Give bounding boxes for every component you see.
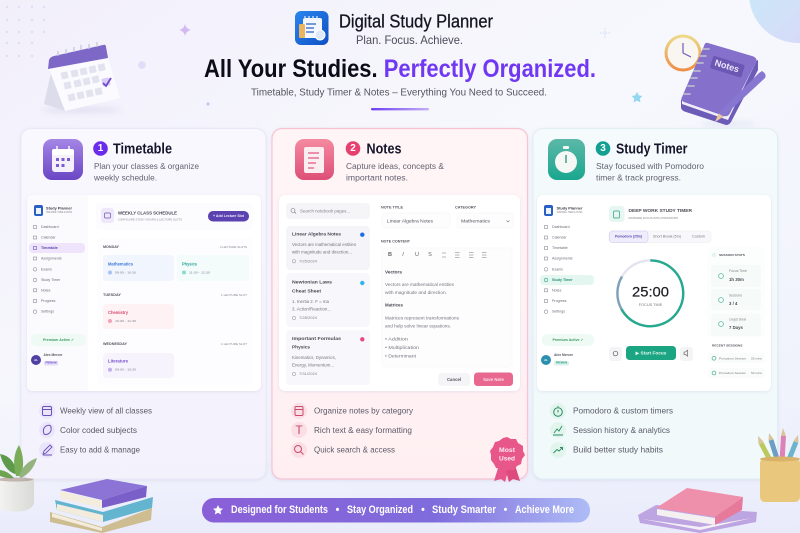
recent sessions: 50 mins (751, 371, 762, 375)
recent sessions: Pomodoro Session (719, 356, 746, 360)
weekly schedule: 11:00 - 12:30 (189, 270, 210, 274)
rich text editor: and help solve linear equations. (385, 324, 451, 328)
icon: star (213, 505, 223, 514)
timer controls (609, 346, 693, 361)
weekly schedule: TUESDAY (103, 293, 122, 297)
premium status: Premium Active ✓ (552, 338, 584, 342)
premium status (31, 334, 86, 346)
sidebar navigation: Settings (41, 310, 54, 314)
heading: study timer: Study Timer (616, 140, 688, 158)
user profile: Alex Mercer (554, 353, 574, 357)
bottom banner (202, 498, 590, 522)
weekly schedule: Chemistry (108, 310, 129, 315)
description: timetable: Plan your classes & organize (94, 161, 199, 171)
timer mode tabs: Short Break (5m) (653, 234, 681, 238)
illustration: clock and notes notebook (664, 34, 766, 126)
icon: organize (291, 403, 307, 419)
icon: search (291, 442, 307, 458)
number badge 1 (93, 141, 108, 156)
app screen: timetable (27, 195, 261, 391)
note form fields: Mathematics (461, 218, 491, 223)
note card: important formulas: 7/31/2024 (299, 372, 317, 376)
sidebar navigation: Study Timer (41, 278, 61, 282)
icon: timetable calendar (43, 139, 83, 180)
description: notes (346, 161, 444, 182)
weekly schedule: Mathematics (108, 262, 134, 266)
timer mode tabs: Pomodoro (25m) (615, 234, 642, 238)
user profile (541, 353, 574, 366)
sidebar navigation: Progress (552, 299, 567, 303)
rich text editor: I (402, 252, 404, 258)
description: timetable (93, 161, 199, 182)
button: cancel (438, 373, 470, 386)
sidebar navigation (29, 225, 85, 314)
rich text editor: with magnitude and direction. (385, 290, 447, 295)
note card: linear algebra: 7/25/2024 (299, 259, 317, 263)
user profile: Alex Mercer (44, 353, 63, 357)
note card: important formulas: Kinematics, Dynamics, (292, 355, 336, 360)
schedule header: + Add Lecture Slot (213, 214, 245, 218)
icon: trend (550, 442, 566, 458)
features: study timer (550, 403, 673, 458)
sidebar brand: TIMETABLE, TIMER & NOTES (556, 211, 583, 214)
sidebar navigation: Assignments (552, 257, 573, 261)
timer mode tabs (609, 231, 711, 242)
user profile (31, 353, 63, 366)
timer header: MAXIMIZE FOCUS WITH POMODORO (628, 216, 679, 220)
illustration: desk calendar (42, 42, 122, 113)
heading: timetable: Timetable (113, 140, 172, 158)
sidebar navigation: Notes (41, 288, 51, 292)
badge: most used: Used (499, 456, 515, 462)
note form fields: CATEGORY (455, 205, 477, 209)
number badge 3 (596, 141, 610, 156)
features: notes (291, 403, 414, 458)
sidebar brand: TIMETABLE, TIMER & NOTES (46, 211, 72, 214)
session stats: Sessions (729, 293, 742, 297)
features: timetable: Easy to add & manage (60, 444, 140, 454)
rich text editor: S (428, 252, 432, 258)
sidebar navigation: Calendar (41, 236, 56, 240)
weekly schedule: Physics (182, 262, 197, 266)
icon: pencil (39, 442, 55, 458)
description: study timer (596, 161, 704, 182)
features: study timer: Session history & analytics (573, 425, 670, 435)
note form fields: NOTE CONTENT (381, 239, 410, 243)
weekly schedule (97, 238, 253, 385)
search field (286, 203, 370, 219)
user profile: AL (544, 358, 548, 362)
timer mode tabs: Custom (692, 234, 705, 238)
button: save note (474, 372, 513, 386)
panel: timetable (21, 128, 266, 479)
note card: important formulas (286, 330, 370, 385)
features: study timer: Pomodoro & custom timers (573, 406, 673, 416)
weekly schedule: 09:00 - 10:30 (115, 368, 136, 372)
user profile: PREMIUM (45, 362, 57, 365)
rich text editor: U (415, 252, 419, 258)
user profile: PREMIUM (556, 362, 567, 365)
timer ring (617, 260, 683, 326)
rich text editor: • Addition (385, 336, 409, 342)
timer controls: ▶ Start Focus (635, 350, 667, 356)
note card: newtonian laws (286, 273, 370, 327)
heading underline (371, 108, 429, 110)
decorative dot grid (6, 6, 45, 57)
session stats: 7 Days (729, 325, 743, 330)
rich text editor: B (388, 252, 392, 258)
description: timetable: weekly schedule. (93, 172, 157, 182)
weekly schedule: MONDAY (103, 245, 120, 249)
header: app logo (295, 11, 328, 45)
note card: newtonian laws: 1. Inertia 2. F = ma (292, 299, 330, 304)
session stats: 1h 30m (729, 277, 744, 282)
note card: linear algebra (286, 226, 370, 270)
rich text editor: • Determinant (385, 354, 417, 358)
rich text editor: Vectors (385, 270, 402, 276)
bottom banner: Study Smarter (432, 504, 496, 516)
session stats: Longest Streak (729, 317, 746, 321)
icon: stopwatch (548, 139, 585, 180)
bottom banner: Stay Organized (347, 504, 413, 516)
recent sessions (708, 343, 765, 378)
user profile: AL (34, 358, 38, 362)
features: notes: Organize notes by category (314, 406, 414, 416)
sidebar navigation: Progress (41, 299, 56, 303)
number badge 1: 1 (98, 143, 104, 154)
schedule header: CONFIGURE STUDY HOURS & LECTURE SLOTS (118, 218, 182, 222)
weekly schedule: 1 LECTURE SLOT (221, 293, 247, 297)
sidebar navigation: Timetable (552, 246, 568, 250)
sidebar brand (544, 205, 583, 216)
app screen: study timer (537, 195, 771, 391)
header: tagline: Plan. Focus. Achieve. (356, 33, 463, 47)
sidebar navigation (540, 225, 594, 314)
premium status: Premium Active ✓ (43, 338, 74, 342)
recent sessions: 25 mins (751, 356, 762, 360)
note card: linear algebra: with magnitude and direction... (292, 250, 352, 254)
sidebar brand: Study Planner (46, 206, 72, 210)
button: cancel: Cancel (447, 377, 461, 382)
session stats: 3 / 4 (729, 301, 738, 306)
bottom banner: • (421, 504, 425, 516)
features: timetable: Color coded subjects (60, 425, 137, 435)
countdown label: FOCUS TIME (639, 303, 663, 307)
sidebar navigation: Timetable (41, 246, 58, 250)
illustration: stacked books left (50, 479, 153, 533)
subheading: Timetable, Study Timer & Notes – Everything You Need to Succeed. (251, 88, 547, 98)
features: study timer: Build better study habits (573, 444, 663, 454)
schedule header (96, 203, 253, 230)
premium status (542, 334, 594, 346)
features: timetable: Weekly view of all classes (60, 406, 152, 416)
weekly schedule: 10:00 - 11:30 (115, 319, 136, 323)
headline: All Your Studies. Perfectly Organized. (204, 55, 596, 83)
description: study timer: Stay focused with Pomodoro (596, 161, 704, 171)
weekly schedule: 09:00 - 10:30 (115, 270, 136, 274)
number badge 2: 2 (350, 143, 356, 154)
timer header: DEEP WORK STUDY TIMER (628, 208, 693, 213)
bottom banner: Achieve More (515, 504, 574, 516)
note card: newtonian laws: Newtonian Laws (292, 280, 332, 286)
search field: Search notebook pages... (300, 208, 350, 214)
rich text editor: Matrices (385, 302, 403, 308)
description: notes: important notes. (346, 172, 408, 182)
features: timetable (39, 403, 152, 458)
icon: text format: T (295, 423, 303, 437)
note card: important formulas: Important Formulas (292, 336, 341, 342)
illustration: potted plant (0, 445, 37, 512)
weekly schedule: 2 LECTURE SLOTS (220, 245, 247, 249)
number badge 3: 3 (600, 143, 606, 154)
bottom banner: • (504, 504, 508, 516)
description: study timer: timer & track progress. (596, 172, 681, 182)
heading: notes: Notes (366, 140, 402, 158)
recent sessions: Pomodoro Session (719, 371, 746, 375)
features: notes: Quick search & access (314, 444, 395, 454)
weekly schedule: WEDNESDAY (103, 342, 128, 346)
icon: color coded (39, 422, 55, 438)
timer header (609, 206, 693, 222)
note card: linear algebra: Linear Algebra Notes (292, 232, 341, 238)
sidebar navigation: Settings (552, 310, 565, 314)
illustration: pencil cup (758, 428, 800, 502)
icon: stopwatch small (550, 403, 566, 419)
weekly schedule: 1 LECTURE SLOT (221, 342, 247, 346)
recent sessions: RECENT SESSIONS (712, 343, 742, 347)
sidebar navigation: Study Timer (552, 278, 573, 282)
bottom banner: Designed for Students (231, 504, 328, 516)
note card: important formulas: Energy, Momentum... (292, 362, 334, 367)
sidebar navigation: Notes (552, 288, 562, 292)
illustration: clock and notes notebook: Notes (714, 58, 740, 74)
illustration: stacked books right (638, 488, 757, 533)
sidebar navigation: Assignments (41, 257, 62, 261)
note card: newtonian laws: 3. Action/Reaction... (292, 306, 331, 311)
features: notes: Rich text & easy formatting (314, 425, 412, 435)
description: notes: Capture ideas, concepts & (346, 161, 444, 171)
button: save note: Save Note (483, 377, 504, 382)
note card: important formulas: Physics (292, 344, 310, 350)
note form fields: NOTE TITLE (381, 205, 404, 209)
rich text editor (382, 248, 512, 367)
sidebar navigation: Calendar (552, 236, 567, 240)
header: title: Digital Study Planner (339, 10, 493, 32)
note form fields: Linear Algebra Notes (387, 218, 434, 223)
rich text editor: Vectors are mathematical entities (385, 282, 455, 287)
icon: weekly view (39, 403, 55, 419)
note form fields (381, 205, 513, 243)
sidebar navigation: Exams (552, 267, 563, 271)
sidebar navigation: Exams (41, 267, 52, 271)
session stats: Focus Time (729, 269, 747, 273)
icon: notes document (295, 139, 334, 180)
note card: newtonian laws: Cheat Sheet (292, 288, 321, 294)
rich text editor: Matrices represent transformations (385, 316, 460, 320)
bottom banner: • (336, 504, 340, 516)
decorative sparkles (138, 24, 642, 106)
app screen: notes (279, 195, 520, 391)
icon: analytics (550, 422, 566, 438)
sidebar navigation: Dashboard (41, 225, 59, 229)
sidebar brand: Study Planner (556, 206, 583, 210)
panel: notes (272, 128, 528, 479)
note card: newtonian laws: 7/28/2024 (299, 316, 317, 320)
schedule header: WEEKLY CLASS SCHEDULE (118, 210, 177, 216)
badge: most used: Most (499, 447, 516, 454)
rich text editor: • Multiplication (385, 345, 420, 350)
weekly schedule: Literature (108, 358, 129, 364)
badge: most used (490, 437, 525, 482)
number badge 2 (346, 141, 360, 156)
note card: linear algebra: Vectors are mathematical entities (292, 242, 357, 247)
sidebar brand (34, 205, 72, 216)
session stats (707, 247, 765, 337)
countdown value: 25:00 (632, 283, 669, 299)
sidebar navigation: Dashboard (552, 225, 570, 229)
session stats: SESSION STATS (719, 253, 745, 257)
panel: study timer (533, 128, 778, 479)
